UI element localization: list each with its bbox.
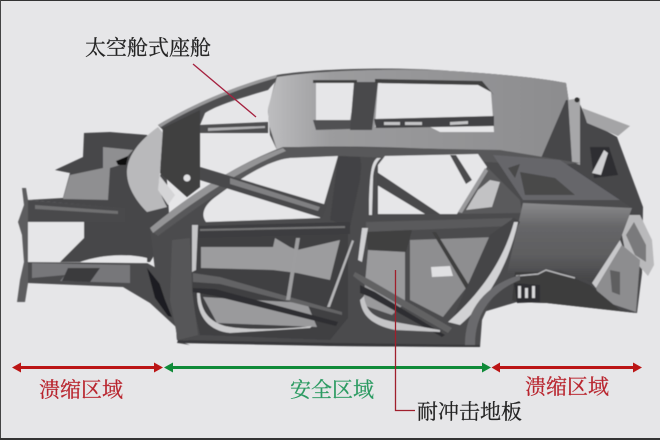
arrow: front crumple zone bbox=[12, 362, 163, 372]
near side body bbox=[150, 147, 632, 347]
label: rear crumple zone: 溃缩区域 bbox=[525, 375, 609, 399]
callout: 耐冲击地板 bbox=[396, 270, 522, 424]
far cross bars in front window bbox=[200, 167, 327, 218]
arrow: safety zone bbox=[164, 362, 491, 372]
rear door window bbox=[378, 154, 487, 214]
quarter window inner bbox=[493, 155, 620, 200]
far windows bbox=[316, 83, 357, 120]
far roof light strip bbox=[158, 75, 277, 127]
label: safety zone: 安全区域 bbox=[290, 378, 374, 402]
A pillar highlight bbox=[150, 148, 286, 233]
label: front crumple zone: 溃缩区域 bbox=[39, 378, 123, 402]
callout: 太空舱式座舱: 太空舱式座舱 bbox=[85, 36, 211, 60]
car body shell bbox=[17, 69, 654, 347]
B pillar highlights bbox=[369, 158, 381, 215]
rear quarter panel bbox=[507, 203, 632, 283]
far side structure bbox=[127, 69, 578, 212]
door rods bbox=[193, 273, 342, 315]
far light C panel bbox=[268, 70, 578, 163]
front door lower bbox=[192, 232, 348, 340]
callout: 太空舱式座舱 bbox=[85, 36, 256, 117]
front door window bbox=[203, 156, 338, 222]
near roof rail bbox=[150, 147, 580, 236]
rear door lower bbox=[363, 250, 405, 315]
front crash structure bbox=[17, 132, 190, 345]
wheel arch and sill bbox=[170, 238, 198, 340]
arrow: rear crumple zone bbox=[492, 362, 642, 372]
far A pillar arch bbox=[127, 127, 167, 212]
far bars in rear window bbox=[377, 172, 440, 214]
door top rail bbox=[196, 222, 350, 238]
callout: 耐冲击地板: 耐冲击地板 bbox=[417, 400, 522, 424]
rear tail structure bbox=[480, 98, 654, 313]
